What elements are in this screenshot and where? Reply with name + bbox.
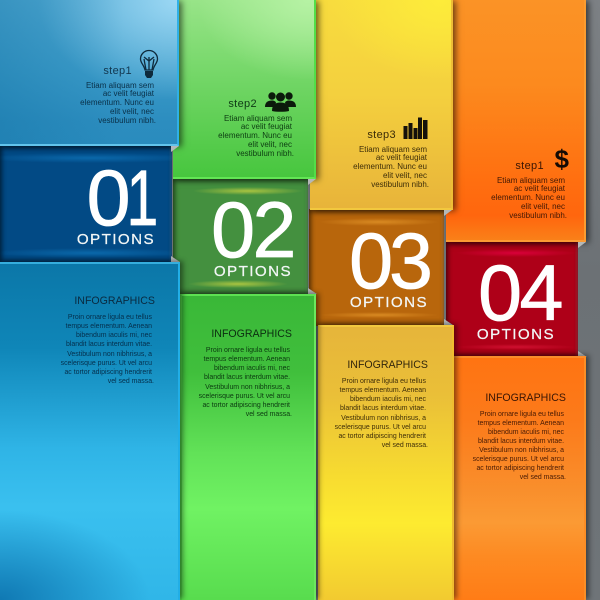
- text: infographics body: bibendum iaculis mi, nec: [350, 396, 426, 403]
- text: infographics body: Vestibulum non nibhrisus, a: [479, 447, 564, 454]
- text: step 2 body: ac velit feugiat: [241, 122, 292, 131]
- label: options: OPTIONS: [477, 326, 555, 343]
- panel: infographics bottom card: [0, 262, 180, 600]
- text: infographics body: scelerisque purus. Ut vel arcu: [61, 360, 152, 367]
- text: step 4 body: Etiam aliquam sem: [497, 176, 565, 184]
- fold: lower corner: [308, 288, 317, 294]
- text: step 4 body: elit velit, nec: [521, 202, 565, 211]
- text: infographics body: [334, 378, 428, 449]
- text: infographics body: vel sed massa.: [246, 411, 292, 418]
- text: step 4 body: ac velit feugiat: [514, 184, 565, 193]
- text: infographics body: Proin ornare ligula eu tellus: [206, 347, 290, 354]
- text: infographics body: bibendum iaculis mi, nec: [214, 365, 290, 372]
- panel: infographics bottom card: [454, 356, 586, 600]
- text: step 2 body: Etiam aliquam sem: [224, 114, 292, 122]
- text: step 1 body: elit velit, nec: [110, 107, 154, 116]
- text: infographics body: scelerisque purus. Ut vel arcu: [199, 393, 290, 400]
- heading: infographics: INFOGRAPHICS: [211, 328, 292, 340]
- label: step1: step1: [515, 160, 544, 172]
- text: step 2 body: vestibulum nibh.: [236, 149, 294, 158]
- icon: bar chart: [404, 118, 428, 139]
- text: step 3 body: Etiam aliquam sem: [359, 144, 427, 154]
- fold: lower corner: [578, 351, 587, 357]
- band: 02 options: [173, 178, 308, 295]
- panel: infographics bottom card: [180, 294, 316, 600]
- panel: infographics bottom card: [318, 325, 454, 600]
- label: options: OPTIONS: [214, 263, 292, 280]
- text: step 4 body: elementum. Nunc eu: [491, 193, 565, 202]
- icon: people: [265, 92, 296, 112]
- text: infographics body: vel sed massa.: [382, 442, 428, 449]
- text: step 2 body: [218, 114, 294, 158]
- icon: dollar sign: $: [555, 144, 569, 174]
- label: step2: step2: [228, 98, 257, 110]
- text: infographics body: ac tortor adipiscing hendrerit: [338, 433, 426, 440]
- text: step 3 body: ac velit feugiat: [376, 153, 427, 162]
- label: options: OPTIONS: [350, 294, 428, 311]
- fold: upper corner: [308, 179, 316, 185]
- panel: step 4 top card: [446, 0, 586, 242]
- text: infographics body: tempus elementum. Aenean: [66, 323, 152, 330]
- text: step 3 body: elementum. Nunc eu: [353, 162, 427, 171]
- text: infographics body: scelerisque purus. Ut vel arcu: [473, 456, 564, 463]
- band: 03 options: [309, 209, 444, 326]
- text: infographics body: Vestibulum non nibhrisus, a: [341, 414, 426, 422]
- heading: infographics: INFOGRAPHICS: [347, 359, 428, 371]
- panel: step 3 top card: [310, 0, 453, 210]
- text: infographics body: Proin ornare ligula eu tellus: [342, 378, 426, 385]
- fold: lower corner: [171, 256, 180, 262]
- number: 01: 1: [126, 153, 156, 242]
- text: infographics body: blandit lacus interdum vitae.: [66, 341, 152, 348]
- text: infographics body: vel sed massa.: [520, 474, 566, 481]
- panel: step 1 top card: [0, 0, 179, 146]
- icon: light bulb: [140, 50, 158, 78]
- text: step 3 body: [353, 144, 429, 189]
- heading: infographics: INFOGRAPHICS: [74, 295, 155, 307]
- text: infographics body: tempus elementum. Aenean: [340, 387, 426, 394]
- text: infographics body: [198, 346, 292, 418]
- text: step 3 body: elit velit, nec: [383, 171, 427, 180]
- fold: upper corner: [171, 146, 179, 152]
- text: step 2 body: elit velit, nec: [248, 140, 292, 149]
- panel: step 2 top card: [173, 0, 316, 179]
- text: infographics body: ac tortor adipiscing hendrerit: [476, 465, 564, 472]
- number: 01: 0: [87, 153, 115, 242]
- fold: lower corner: [444, 319, 453, 325]
- text: infographics body: Vestibulum non nibhrisus, a: [67, 350, 152, 358]
- label: step1: step1: [103, 65, 132, 77]
- text: infographics body: bibendum iaculis mi, nec: [488, 429, 564, 436]
- number: 04: 04: [478, 248, 561, 337]
- fold: upper corner: [444, 210, 452, 216]
- text: infographics body: tempus elementum. Aenean: [204, 356, 290, 363]
- label: options: OPTIONS: [77, 231, 155, 248]
- band: 04 options: [446, 241, 578, 357]
- text: infographics body: blandit lacus interdum vitae.: [340, 405, 426, 412]
- text: step 3 body: vestibulum nibh.: [371, 180, 429, 189]
- fold: upper corner: [578, 242, 586, 248]
- heading: infographics: INFOGRAPHICS: [485, 392, 566, 404]
- text: infographics body: blandit lacus interdum vitae.: [204, 374, 290, 381]
- text: infographics body: Proin ornare ligula eu tellus: [68, 314, 152, 321]
- text: infographics body: tempus elementum. Aenean: [478, 420, 564, 427]
- text: step 4 body: vestibulum nibh.: [509, 211, 567, 220]
- panel: column 1 blue: [0, 0, 186, 600]
- text: infographics body: Proin ornare ligula eu tellus: [480, 410, 564, 418]
- text: step 1 body: elementum. Nunc eu: [80, 98, 154, 107]
- panel: column 3 yellow: [309, 0, 461, 600]
- text: infographics body: ac tortor adipiscing hendrerit: [64, 369, 152, 376]
- text: step 1 body: vestibulum nibh.: [98, 116, 156, 125]
- text: step 2 body: elementum. Nunc eu: [218, 131, 292, 140]
- text: step 1 body: [80, 80, 156, 125]
- text: infographics body: scelerisque purus. Ut vel arcu: [335, 424, 426, 431]
- text: infographics body: [472, 410, 566, 481]
- number: 03: 03: [349, 216, 429, 305]
- panel: column 2 green: [172, 0, 324, 600]
- text: infographics body: Vestibulum non nibhrisus, a: [205, 384, 290, 390]
- text: step 4 body: [491, 176, 567, 220]
- number: 01: [87, 153, 156, 242]
- band: 01 options: [0, 145, 172, 263]
- text: infographics body: ac tortor adipiscing hendrerit: [202, 402, 290, 409]
- text: step 1 body: Etiam aliquam sem: [86, 80, 154, 90]
- panel: column 4 orange: [446, 0, 593, 600]
- text: step 1 body: ac velit feugiat: [103, 89, 154, 98]
- text: infographics body: [60, 314, 154, 385]
- label: step3: step3: [367, 129, 396, 141]
- number: 02: 02: [211, 185, 294, 274]
- text: infographics body: bibendum iaculis mi, nec: [76, 332, 152, 339]
- text: infographics body: blandit lacus interdum vitae.: [478, 438, 564, 445]
- text: infographics body: vel sed massa.: [108, 378, 154, 385]
